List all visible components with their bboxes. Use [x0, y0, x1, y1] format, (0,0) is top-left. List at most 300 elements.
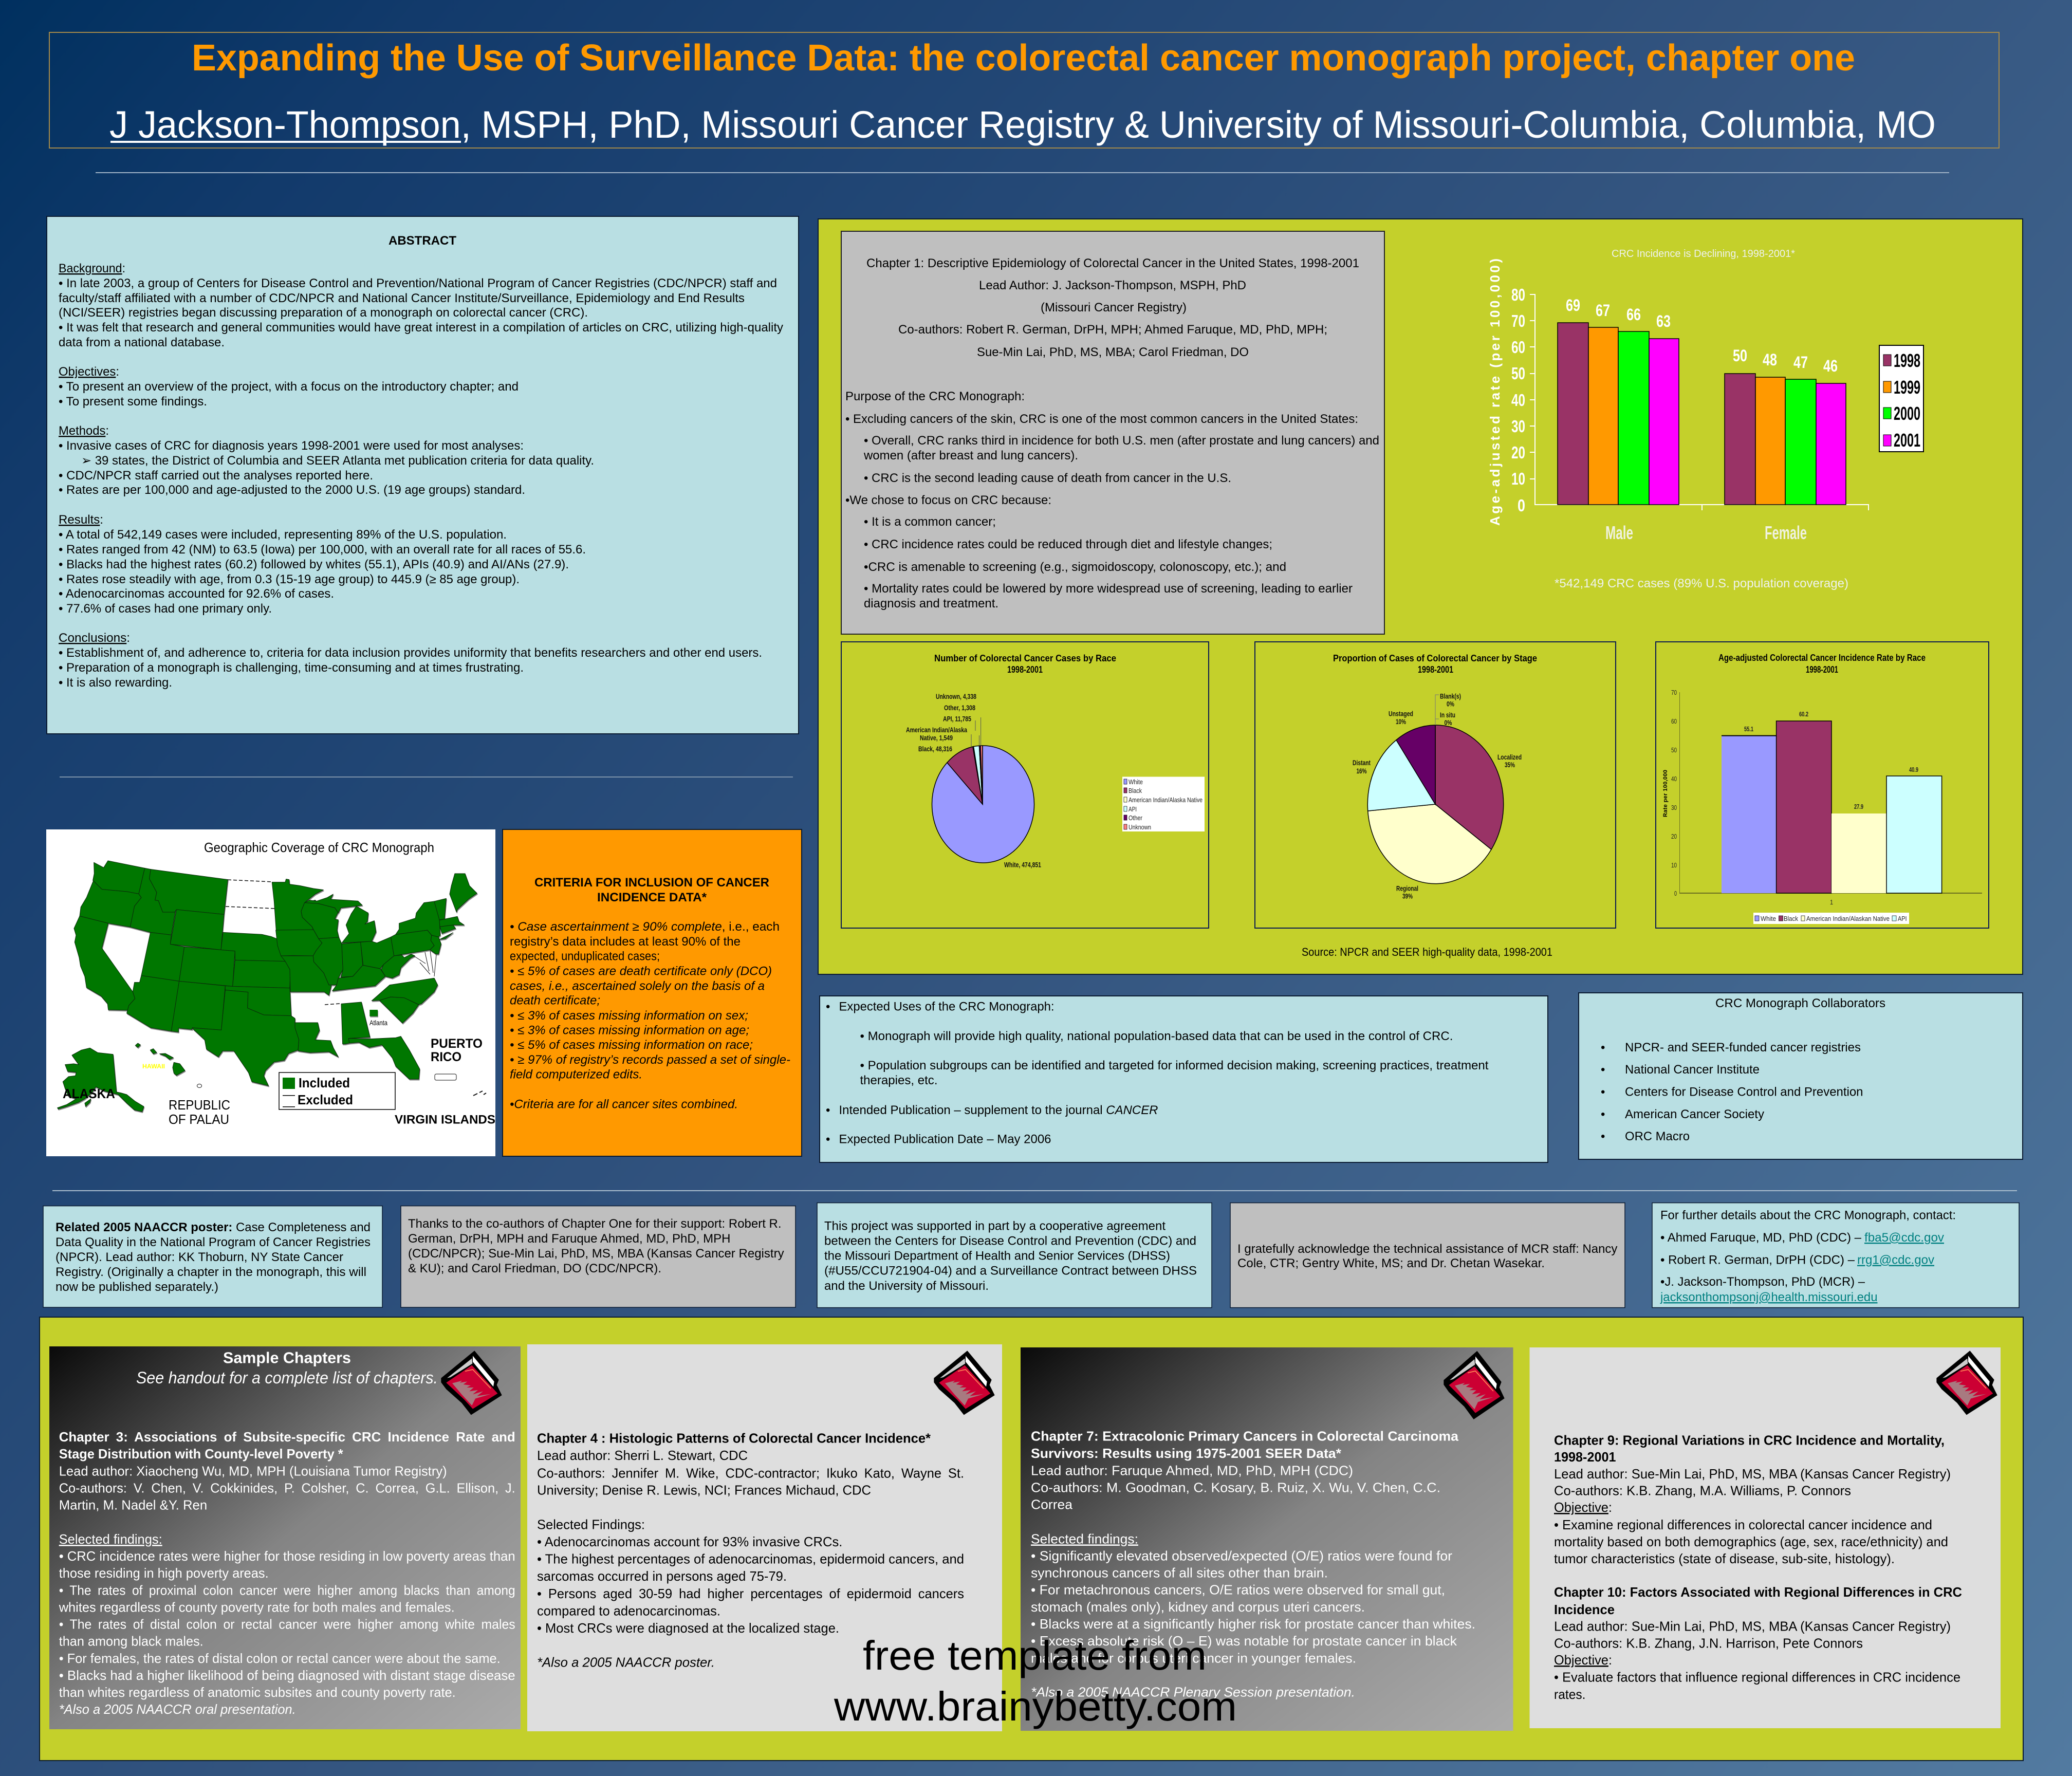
chapter 7 text: • For metachronous cancers, O/E ratios were observed for small gut, — [1031, 1582, 1445, 1598]
y axis label: Rate per 100,000 — [1662, 770, 1669, 817]
panel: expected uses: Expected Publication Date – May 2006 — [839, 1133, 1051, 1146]
criteria list: •Criteria are for all cancer sites combined. — [510, 1098, 738, 1112]
panel: funding: the Missouri Department of Health and Senior Services (DHSS) — [824, 1249, 1170, 1263]
chapter 1 text box: • Overall, CRC ranks third in incidence for both U.S. men (after prostate and lung cancers) and — [864, 434, 1379, 448]
abstract text: • To present some findings. — [59, 395, 207, 409]
panel: collaborators: National Cancer Institute — [1625, 1063, 1760, 1077]
panel: collaborators: CRC Monograph Collaborators — [1715, 996, 1885, 1010]
abstract text: • Preparation of a monograph is challenging, time-consuming and at times frustrating. — [59, 661, 524, 675]
chapter 4 text — [537, 1431, 964, 1670]
slice labels: Regional — [1396, 884, 1418, 892]
chart title — [1718, 653, 1926, 675]
abstract text: Methods: — [59, 424, 109, 438]
criteria list: cases, i.e., ascertained solely on the basis of a — [510, 979, 765, 993]
chapter 3 text: Co-authors: V. Chen, V. Cokkinides, P. Colsher, C. Correa, G.L. Ellison, J. — [59, 1481, 515, 1496]
slice labels: Blank(s) — [1440, 692, 1461, 700]
authors: J Jackson-Thompson, MSPH, PhD, Missouri Cancer Registry & University of Missouri-Columbia, Columbia, MO — [109, 103, 1936, 146]
chapter 7 text: Co-authors: M. Goodman, C. Kosary, B. Ruiz, X. Wu, V. Chen, C.C. — [1031, 1480, 1440, 1495]
chapter 1 text box: (Missouri Cancer Registry) — [1041, 301, 1187, 314]
abstract text: • Rates are per 100,000 and age-adjusted to the 2000 U.S. (19 age groups) standard. — [59, 483, 525, 497]
abstract text: • CDC/NPCR staff carried out the analyses reported here. — [59, 469, 373, 483]
panel: expected uses: • — [826, 1000, 830, 1013]
abstract text: • A total of 542,149 cases were included, representing 89% of the U.S. population. — [59, 528, 507, 542]
legend: 1998 — [1894, 350, 1920, 371]
abstract text: Conclusions: — [59, 631, 130, 645]
legend: 1999 — [1894, 377, 1920, 398]
leader lines — [1435, 695, 1439, 725]
panel: expected uses: • Population subgroups can be identified and targeted for informed decision making, screening practices, treatment — [860, 1059, 1489, 1072]
legend: API — [1128, 805, 1137, 813]
chapter 10 text: Chapter 10: Factors Associated with Regional Differences in CRC — [1554, 1584, 1962, 1600]
panel: related poster: Related 2005 NAACCR poster: Case Completeness and — [55, 1220, 371, 1234]
chapter 10 text: Objective: — [1554, 1652, 1612, 1668]
card: chapter 7 — [1021, 1347, 1513, 1731]
criteria heading: CRITERIA FOR INCLUSION OF CANCER — [534, 876, 769, 890]
chapter 4 text: • Adenocarcinomas account for 93% invasive CRCs. — [537, 1534, 842, 1549]
tick labels: 20 — [1511, 443, 1525, 462]
legend: White — [1761, 915, 1776, 922]
chapter 4 text: Selected Findings: — [537, 1516, 645, 1532]
tick labels: 80 — [1511, 285, 1525, 304]
bar value labels — [1566, 296, 1838, 375]
US map — [58, 861, 486, 1112]
chapter 7 text: Correa — [1031, 1497, 1073, 1512]
card: chapter 4 — [527, 1344, 1002, 1731]
slice labels: 39% — [1402, 892, 1413, 900]
chapter 3 text: than whites regardless of anatomic subsites and county poverty rate. — [59, 1685, 456, 1700]
chapter 1 text box — [841, 231, 1384, 634]
map labels: OF PALAU — [169, 1112, 229, 1127]
chapter 1 text box: • Excluding cancers of the skin, CRC is one of the most common cancers in the United States: — [845, 412, 1358, 426]
legend: Black — [1128, 787, 1142, 794]
slice labels: Other, 1,308 — [944, 704, 975, 712]
bars — [1558, 323, 1846, 505]
watermark — [834, 1633, 1237, 1729]
panel: related poster: Registry. (Originally a chapter in the monograph, this will — [55, 1265, 366, 1279]
panel: contacts: rrg1@cdc.gov — [1857, 1253, 1934, 1267]
bar chart: CRC incidence declining — [1487, 248, 1923, 590]
legend: Unknown — [1128, 823, 1151, 831]
axis tick labels: 50 — [1671, 746, 1677, 754]
panel: collaborators: • — [1601, 1130, 1605, 1143]
chapter 3 text: Selected findings: — [59, 1531, 162, 1547]
panel: thanks — [401, 1206, 795, 1307]
chapter 7 text: stomach (males only), kidney and corpus uteri cancers. — [1031, 1599, 1365, 1615]
tick labels: 50 — [1511, 364, 1525, 383]
category labels — [1605, 522, 1807, 543]
panel: collaborators: Centers for Disease Control and Prevention — [1625, 1085, 1863, 1099]
chapter 4 text: Lead author: Sherri L. Stewart, CDC — [537, 1448, 748, 1463]
abstract text: (NCI/SEER) registries began discussing preparation of a monograph on colorectal cancer (CRC). — [59, 306, 588, 320]
abstract text: • Blacks had the highest rates (60.2) followed by whites (55.1), APIs (40.9) and AI/ANs (27.9). — [59, 558, 569, 571]
panel: collaborators: • — [1601, 1085, 1605, 1099]
chapter 1 text box: •We chose to focus on CRC because: — [845, 493, 1051, 507]
panel: funding: (#U55/CCU721904-04) and a Surveillance Contract between DHSS — [824, 1264, 1197, 1278]
chapter 7 text: Chapter 7: Extracolonic Primary Cancers in Colorectal Carcinoma — [1031, 1429, 1459, 1444]
chapter 7 text: males and for corpus uteri cancer in younger females. — [1031, 1651, 1356, 1666]
chapter 4 text: Chapter 4 : Histologic Patterns of Colorectal Cancer Incidence* — [537, 1431, 931, 1446]
chapter 7 text: • Blacks were at a significantly higher risk for prostate cancer than whites. — [1031, 1616, 1475, 1632]
map legend — [279, 1072, 395, 1109]
panel: contacts: • Robert R. German, DrPH (CDC) – — [1660, 1253, 1855, 1267]
chapter 7 text: Lead author: Faruque Ahmed, MD, PhD, MPH (CDC) — [1031, 1463, 1353, 1478]
panel: expected uses: • — [826, 1133, 830, 1146]
panel: expected uses: • — [826, 1103, 830, 1117]
criteria list: field computerized edits. — [510, 1068, 642, 1082]
chart title: CRC Incidence is Declining, 1998-2001* — [1612, 248, 1795, 260]
chapter 3 text: Lead author: Xiaocheng Wu, MD, MPH (Louisiana Tumor Registry) — [59, 1464, 447, 1479]
axis tick labels: 20 — [1671, 832, 1677, 840]
chart title: Age-adjusted Colorectal Cancer Incidence Rate by Race — [1718, 653, 1926, 663]
map labels: RICO — [431, 1050, 461, 1064]
icon: book — [934, 1350, 995, 1415]
map labels: PUERTO — [431, 1037, 483, 1051]
bar value labels: 40.9 — [1909, 766, 1918, 773]
panel: collaborators: American Cancer Society — [1625, 1107, 1764, 1121]
panel: collaborators: ORC Macro — [1625, 1130, 1690, 1143]
map title: Geographic Coverage of CRC Monograph — [204, 840, 434, 855]
chapter 3 text: *Also a 2005 NAACCR oral presentation. — [59, 1701, 296, 1717]
chapter 1 text box: Lead Author: J. Jackson-Thompson, MSPH, PhD — [979, 279, 1246, 292]
bar value labels: 27.9 — [1854, 803, 1863, 810]
chapter 9 text — [1554, 1432, 1951, 1566]
panel: acknowledgement — [1230, 1203, 1625, 1308]
abstract text: • To present an overview of the project, with a focus on the introductory chapter; and — [59, 380, 519, 394]
pie slices — [1367, 725, 1504, 884]
abstract text: • Rates rose steadily with age, from 0.3 (15-19 age group) to 445.9 (≥ 85 age group). — [59, 572, 520, 586]
abstract heading: ABSTRACT — [388, 234, 456, 248]
criteria list — [510, 920, 790, 1112]
slice labels: Unstaged — [1389, 709, 1413, 717]
chart title — [1333, 653, 1537, 675]
panel: funding: and the University of Missouri. — [824, 1279, 989, 1293]
bar value labels: 60.2 — [1799, 710, 1808, 718]
map labels — [63, 1019, 495, 1127]
panel: thanks: German, DrPH, MPH and Faruque Ahmed, MD, PhD, MPH — [408, 1232, 731, 1246]
panel: expected uses: Intended Publication – supplement to the journal CANCER — [839, 1103, 1158, 1117]
category labels: Male — [1605, 522, 1633, 543]
chapter 3 text: • The rates of proximal colon cancer were higher among blacks than among — [59, 1582, 515, 1598]
pie chart: cases by race — [841, 642, 1209, 928]
legend — [1753, 913, 1909, 924]
title: Expanding the Use of Surveillance Data: the colorectal cancer monograph project, chapter one — [192, 38, 1855, 79]
chapter 4 text: sarcomas occurred in persons aged 75-79. — [537, 1568, 787, 1584]
panel: abstract — [47, 216, 799, 734]
criteria list: • ≤ 5% of cases are death certificate only (DCO) — [510, 965, 772, 978]
source note: Source: NPCR and SEER high-quality data, 1998-2001 — [1302, 946, 1552, 958]
category labels: Female — [1765, 522, 1807, 543]
abstract text: Objectives: — [59, 365, 119, 379]
chapter 10 text: Co-authors: K.B. Zhang, J.N. Harrison, Pete Connors — [1554, 1635, 1863, 1651]
panel: related poster: Data Quality in the National Program of Cancer Registries — [55, 1235, 371, 1249]
chapter 1 text box: • It is a common cancer; — [864, 515, 996, 529]
slice labels: 0% — [1447, 700, 1454, 708]
axis tick labels: 70 — [1671, 689, 1677, 696]
chapter 7 text: • Excess absolute risk (O – E) was notable for prostate cancer in black — [1031, 1633, 1457, 1649]
chapter 4 text: compared to adenocarcinomas. — [537, 1603, 720, 1619]
abstract text: • 77.6% of cases had one primary only. — [59, 602, 272, 616]
chapter 3 text: Martin, M. Nadel &Y. Ren — [59, 1497, 207, 1513]
chart title: 1998-2001 — [1007, 664, 1043, 675]
chart title — [934, 653, 1116, 675]
map labels: REPUBLIC — [169, 1097, 230, 1113]
legend: American Indian/Alaskan Native — [1806, 915, 1890, 922]
panel: funding — [817, 1203, 1212, 1308]
tick labels: 60 — [1511, 338, 1525, 357]
slice labels: American Indian/Alaska — [906, 726, 967, 734]
panel: contacts — [1652, 1203, 2019, 1308]
criteria list: • ≤ 3% of cases missing information on sex; — [510, 1009, 748, 1023]
map labels: ALASKA — [63, 1086, 115, 1101]
axis tick labels: 30 — [1671, 804, 1677, 811]
abstract text: • It is also rewarding. — [59, 676, 172, 690]
chapter 1 text box: •CRC is amenable to screening (e.g., sigmoidoscopy, colonoscopy, etc.); and — [864, 560, 1286, 574]
panel: funding: This project was supported in part by a cooperative agreement — [824, 1219, 1166, 1233]
slice labels: Black, 48,316 — [918, 745, 952, 753]
chapter 7 text: synchronous cancers of all sites other than brain. — [1031, 1565, 1328, 1581]
icon: book — [441, 1350, 502, 1415]
panel: contacts: jacksonthompsonj@health.missouri.edu — [1660, 1290, 1878, 1304]
map legend: Included — [299, 1075, 350, 1090]
chapter 1 text box: Chapter 1: Descriptive Epidemiology of Colorectal Cancer in the United States, 1998-2001 — [866, 256, 1359, 270]
chapter 4 text: • Persons aged 30-59 had higher percentages of epidermoid cancers — [537, 1586, 964, 1601]
panel: expected uses — [820, 996, 1548, 1162]
icon: book — [1444, 1351, 1505, 1419]
panel: collaborators: • — [1601, 1107, 1605, 1121]
chapter 1 text box: Purpose of the CRC Monograph: — [845, 390, 1025, 403]
panel: acknowledgement: I gratefully acknowledge the technical assistance of MCR staff: Nancy — [1237, 1242, 1617, 1256]
chapter 9 text: Co-authors: K.B. Zhang, M.A. Williams, P. Connors — [1554, 1483, 1851, 1498]
map labels: HAWAII — [142, 1063, 165, 1070]
bar value labels: 46 — [1823, 357, 1838, 375]
abstract text: • Establishment of, and adherence to, criteria for data inclusion provides uniformity that benefits researchers and other end users. — [59, 646, 762, 660]
dashed borders of excluded states — [226, 880, 340, 1005]
bar value labels: 50 — [1733, 346, 1747, 365]
abstract text: Background: — [59, 262, 125, 275]
axis tick labels: 0 — [1674, 890, 1677, 897]
sample chapters heading: Sample Chapters — [223, 1349, 351, 1367]
criteria list: • ≥ 97% of registry’s records passed a set of single- — [510, 1053, 790, 1067]
card: chapters 9 and 10 — [1529, 1347, 2001, 1728]
chapter 9 text: • Examine regional differences in colorectal cancer incidence and — [1554, 1517, 1932, 1532]
criteria heading — [534, 876, 769, 904]
chapter 1 text box: diagnosis and treatment. — [864, 597, 998, 610]
panel: contacts: •J. Jackson-Thompson, PhD (MCR) – — [1660, 1275, 1865, 1289]
legend — [1879, 345, 1923, 452]
chapter 3 text — [59, 1429, 515, 1717]
criteria heading: INCIDENCE DATA* — [597, 891, 707, 904]
criteria list: death certificate; — [510, 994, 600, 1008]
panel: related poster — [43, 1206, 382, 1307]
panel: collaborators — [1579, 993, 2023, 1159]
chapter 7 text: Selected findings: — [1031, 1531, 1138, 1546]
legend: White — [1128, 778, 1143, 786]
slice labels: 16% — [1357, 767, 1367, 775]
abstract text: • Adenocarcinomas accounted for 92.6% of cases. — [59, 587, 334, 601]
title block — [49, 32, 1999, 148]
criteria list: • ≤ 3% of cases missing information on age; — [510, 1024, 749, 1037]
slice labels: 35% — [1505, 761, 1515, 769]
chapter 10 text: • Evaluate factors that influence regional differences in CRC incidence — [1554, 1670, 1960, 1685]
panel: inclusion criteria — [503, 829, 802, 1156]
bars — [1722, 721, 1942, 893]
bar value labels: 47 — [1793, 353, 1808, 372]
slice labels: API, 11,785 — [943, 714, 971, 723]
chapter 7 text: *Also a 2005 NAACCR Plenary Session presentation. — [1031, 1684, 1355, 1699]
panel: contacts: • Ahmed Faruque, MD, PhD (CDC) – — [1660, 1231, 1862, 1245]
chapter 3 text: whites regardless of county poverty rate for both males and females. — [59, 1599, 455, 1615]
bar value labels: 66 — [1626, 305, 1641, 324]
chapter 7 text: • Significantly elevated observed/expected (O/E) ratios were found for — [1031, 1548, 1452, 1563]
legend: 2000 — [1894, 403, 1920, 424]
abstract text — [59, 262, 783, 690]
pie slices — [932, 746, 1034, 863]
panel: expected uses: • Monograph will provide high quality, national population-based data that can be used in the control of CRC. — [860, 1029, 1453, 1043]
panel: contacts: For further details about the CRC Monograph, contact: — [1660, 1209, 1956, 1223]
chapter 9 text: tumor characteristics (state of disease, sub-site, histology). — [1554, 1551, 1895, 1566]
panel: acknowledgement: Cole, CTR; Gentry White, MS; and Dr. Chetan Wasekar. — [1237, 1256, 1545, 1270]
tick labels: 40 — [1511, 391, 1525, 410]
chapter 9 text: mortality based on both demographics (age, sex, race/ethnicity) and — [1554, 1534, 1948, 1549]
chapter 9 text: 1998-2001 — [1554, 1449, 1616, 1465]
panel: contacts: fba5@cdc.gov — [1864, 1231, 1944, 1245]
chapter 4 text: Co-authors: Jennifer M. Wike, CDC-contractor; Ikuko Kato, Wayne St. — [537, 1465, 964, 1481]
card: chapter 3 — [49, 1346, 521, 1729]
panel: thanks: Thanks to the co-authors of Chapter One for their support: Robert R. — [408, 1217, 781, 1231]
axes — [1679, 692, 1982, 894]
bar chart: incidence rate by race — [1656, 642, 1989, 928]
y axis ticks — [1530, 294, 1869, 510]
legend: Black — [1784, 915, 1798, 922]
criteria list: • Case ascertainment ≥ 90% complete, i.e., each — [510, 920, 780, 934]
chapter 1 text box: women (after breast and lung cancers). — [863, 449, 1078, 462]
chapter 1 text box: • CRC incidence rates could be reduced through diet and lifestyle changes; — [864, 538, 1272, 551]
panel: chapter one overview — [818, 219, 2023, 974]
bar value labels: 67 — [1596, 301, 1610, 320]
slice labels: 0% — [1444, 718, 1452, 727]
tick labels: 0 — [1518, 496, 1525, 515]
axis tick labels: 40 — [1671, 775, 1677, 783]
slice labels: Native, 1,549 — [920, 734, 953, 742]
Virgin Islands marks — [473, 1091, 486, 1096]
legend: 2001 — [1894, 430, 1920, 451]
chart title: Proportion of Cases of Colorectal Cancer by Stage — [1333, 653, 1537, 663]
leader lines — [971, 717, 981, 747]
pie chart: cases by stage — [1255, 642, 1616, 928]
panel: collaborators: NPCR- and SEER-funded cancer registries — [1625, 1041, 1861, 1054]
chapter 3 text: Stage Distribution with County-level Poverty * — [59, 1446, 344, 1461]
axis tick labels — [1671, 689, 1833, 906]
bar value labels: 48 — [1763, 350, 1777, 369]
panel: related poster: now be published separately.) — [55, 1280, 218, 1294]
chapter 10 text — [1554, 1584, 1962, 1702]
legend: Other — [1128, 814, 1143, 822]
criteria list: • ≤ 5% of cases missing information on race; — [510, 1038, 753, 1052]
chapter 1 text box: • Mortality rates could be lowered by more widespread use of screening, leading to earlier — [864, 582, 1353, 596]
tick labels: 70 — [1511, 311, 1525, 330]
map labels: Atlanta — [369, 1019, 387, 1027]
abstract text: • Rates ranged from 42 (NM) to 63.5 (Iowa) per 100,000, with an overall rate for all races of 55.6. — [59, 543, 586, 557]
chapter 7 text: Survivors: Results using 1975-2001 SEER Data* — [1031, 1446, 1342, 1461]
chapter 10 text: Lead author: Sue-Min Lai, PhD, MS, MBA (Kansas Cancer Registry) — [1554, 1618, 1951, 1634]
legend: API — [1898, 915, 1907, 922]
panel: expected uses: therapies, etc. — [860, 1074, 937, 1087]
chapter 4 text: • The highest percentages of adenocarcinomas, epidermoid cancers, and — [537, 1551, 964, 1567]
bar value labels: 63 — [1656, 312, 1671, 330]
axis tick labels: 60 — [1671, 717, 1677, 725]
abstract text: data from a national database. — [59, 336, 225, 349]
abstract text: • It was felt that research and general communities would have great interest in a compilation of articles on CRC, utilizing high-quality — [59, 321, 783, 335]
abstract text: Results: — [59, 513, 103, 527]
abstract text: • In late 2003, a group of Centers for Disease Control and Prevention/National Program of Cancer Registries (CDC/NPCR) staff and — [59, 276, 777, 290]
abstract text: • Invasive cases of CRC for diagnosis years 1998-2001 were used for most analyses: — [59, 439, 524, 453]
panel: collaborators: • — [1601, 1063, 1605, 1077]
chapter 3 text: • CRC incidence rates were higher for those residing in low poverty areas than — [59, 1548, 515, 1564]
chapter 3 text: • The rates of distal colon or rectal cancer were higher among white males — [59, 1617, 515, 1632]
chapter 1 text box: Co-authors: Robert R. German, DrPH, MPH; Ahmed Faruque, MD, PhD, MPH; — [898, 323, 1327, 337]
chapter 1 text box: Sue-Min Lai, PhD, MS, MBA; Carol Friedman, DO — [977, 345, 1249, 359]
panel: funding: between the Centers for Disease Control and Prevention (CDC) and — [824, 1234, 1196, 1248]
tick labels: 30 — [1511, 417, 1525, 436]
bar value labels — [1744, 710, 1918, 810]
Palau outline — [197, 1084, 201, 1087]
Puerto Rico outline — [435, 1074, 456, 1080]
axis tick labels: 1 — [1830, 898, 1833, 906]
chapter 4 text: *Also a 2005 NAACCR poster. — [537, 1655, 715, 1670]
abstract text: ➢ 39 states, the District of Columbia and SEER Atlanta met publication criteria for data quality. — [81, 454, 594, 468]
chapter 1 text box: • CRC is the second leading cause of death from cancer in the U.S. — [864, 471, 1231, 485]
panel: sample chapters — [40, 1317, 2023, 1761]
chapter 3 text: those residing in high poverty areas. — [59, 1565, 269, 1581]
chapter 4 text: • Most CRCs were diagnosed at the localized stage. — [537, 1620, 839, 1636]
panel: geographic coverage map — [46, 829, 495, 1156]
legend: American Indian/Alaska Native — [1128, 796, 1202, 804]
slice labels: Distant — [1353, 758, 1371, 767]
abstract text: faculty/staff affiliated with a number of CDC/NPCR and National Cancer Institute/Surveillance, Epidemiology and End Results — [59, 291, 745, 305]
criteria list: expected, unduplicated cases; — [510, 950, 660, 964]
chapter 9 text: Objective: — [1554, 1500, 1612, 1515]
bar value labels: 55.1 — [1744, 725, 1753, 733]
panel: related poster: (NPCR). Lead author: KK Thoburn, NY State Cancer — [55, 1250, 343, 1264]
chart title: Number of Colorectal Cancer Cases by Race — [934, 653, 1116, 663]
legend — [1122, 777, 1205, 831]
slice labels — [906, 692, 1041, 869]
chapter 3 text: • Blacks had a higher likelihood of being diagnosed with distant stage disease — [59, 1668, 515, 1683]
chapter 4 text: University; Denise R. Lewis, NCI; Frances Michaud, CDC — [537, 1482, 871, 1497]
slice labels: 10% — [1396, 717, 1406, 726]
panel: thanks: (CDC/NPCR); Sue-Min Lai, PhD, MS, MBA (Kansas Cancer Registry — [408, 1247, 784, 1261]
chapter 10 text: Incidence — [1554, 1602, 1615, 1617]
tick labels — [1511, 285, 1525, 515]
panel: thanks: & KU); and Carol Friedman, DO (CDC/NPCR). — [408, 1262, 661, 1275]
y axis label: Age-adjusted rate (per 100,000) — [1487, 258, 1503, 526]
chart title: 1998-2001 — [1418, 664, 1453, 675]
map labels: VIRGIN ISLANDS — [395, 1113, 495, 1126]
slice labels: Unknown, 4,338 — [936, 692, 976, 700]
criteria list: registry’s data includes at least 90% of the — [510, 935, 741, 949]
chapter 9 text: Lead author: Sue-Min Lai, PhD, MS, MBA (Kansas Cancer Registry) — [1554, 1466, 1951, 1482]
chapter 3 text: • For females, the rates of distal colon or rectal cancer were about the same. — [59, 1651, 501, 1666]
chart footnote: *542,149 CRC cases (89% U.S. population coverage) — [1555, 577, 1848, 590]
chapter 3 text: Chapter 3: Associations of Subsite-specific CRC Incidence Rate and — [59, 1429, 515, 1445]
bar value labels: 69 — [1566, 296, 1580, 314]
slice labels — [1353, 692, 1522, 900]
handout note: See handout for a complete list of chapters. — [136, 1368, 438, 1387]
icon: book — [1936, 1350, 1997, 1415]
chart title: 1998-2001 — [1806, 664, 1838, 675]
axis tick labels: 10 — [1671, 861, 1677, 869]
chapter 3 text: than among black males. — [59, 1634, 203, 1649]
